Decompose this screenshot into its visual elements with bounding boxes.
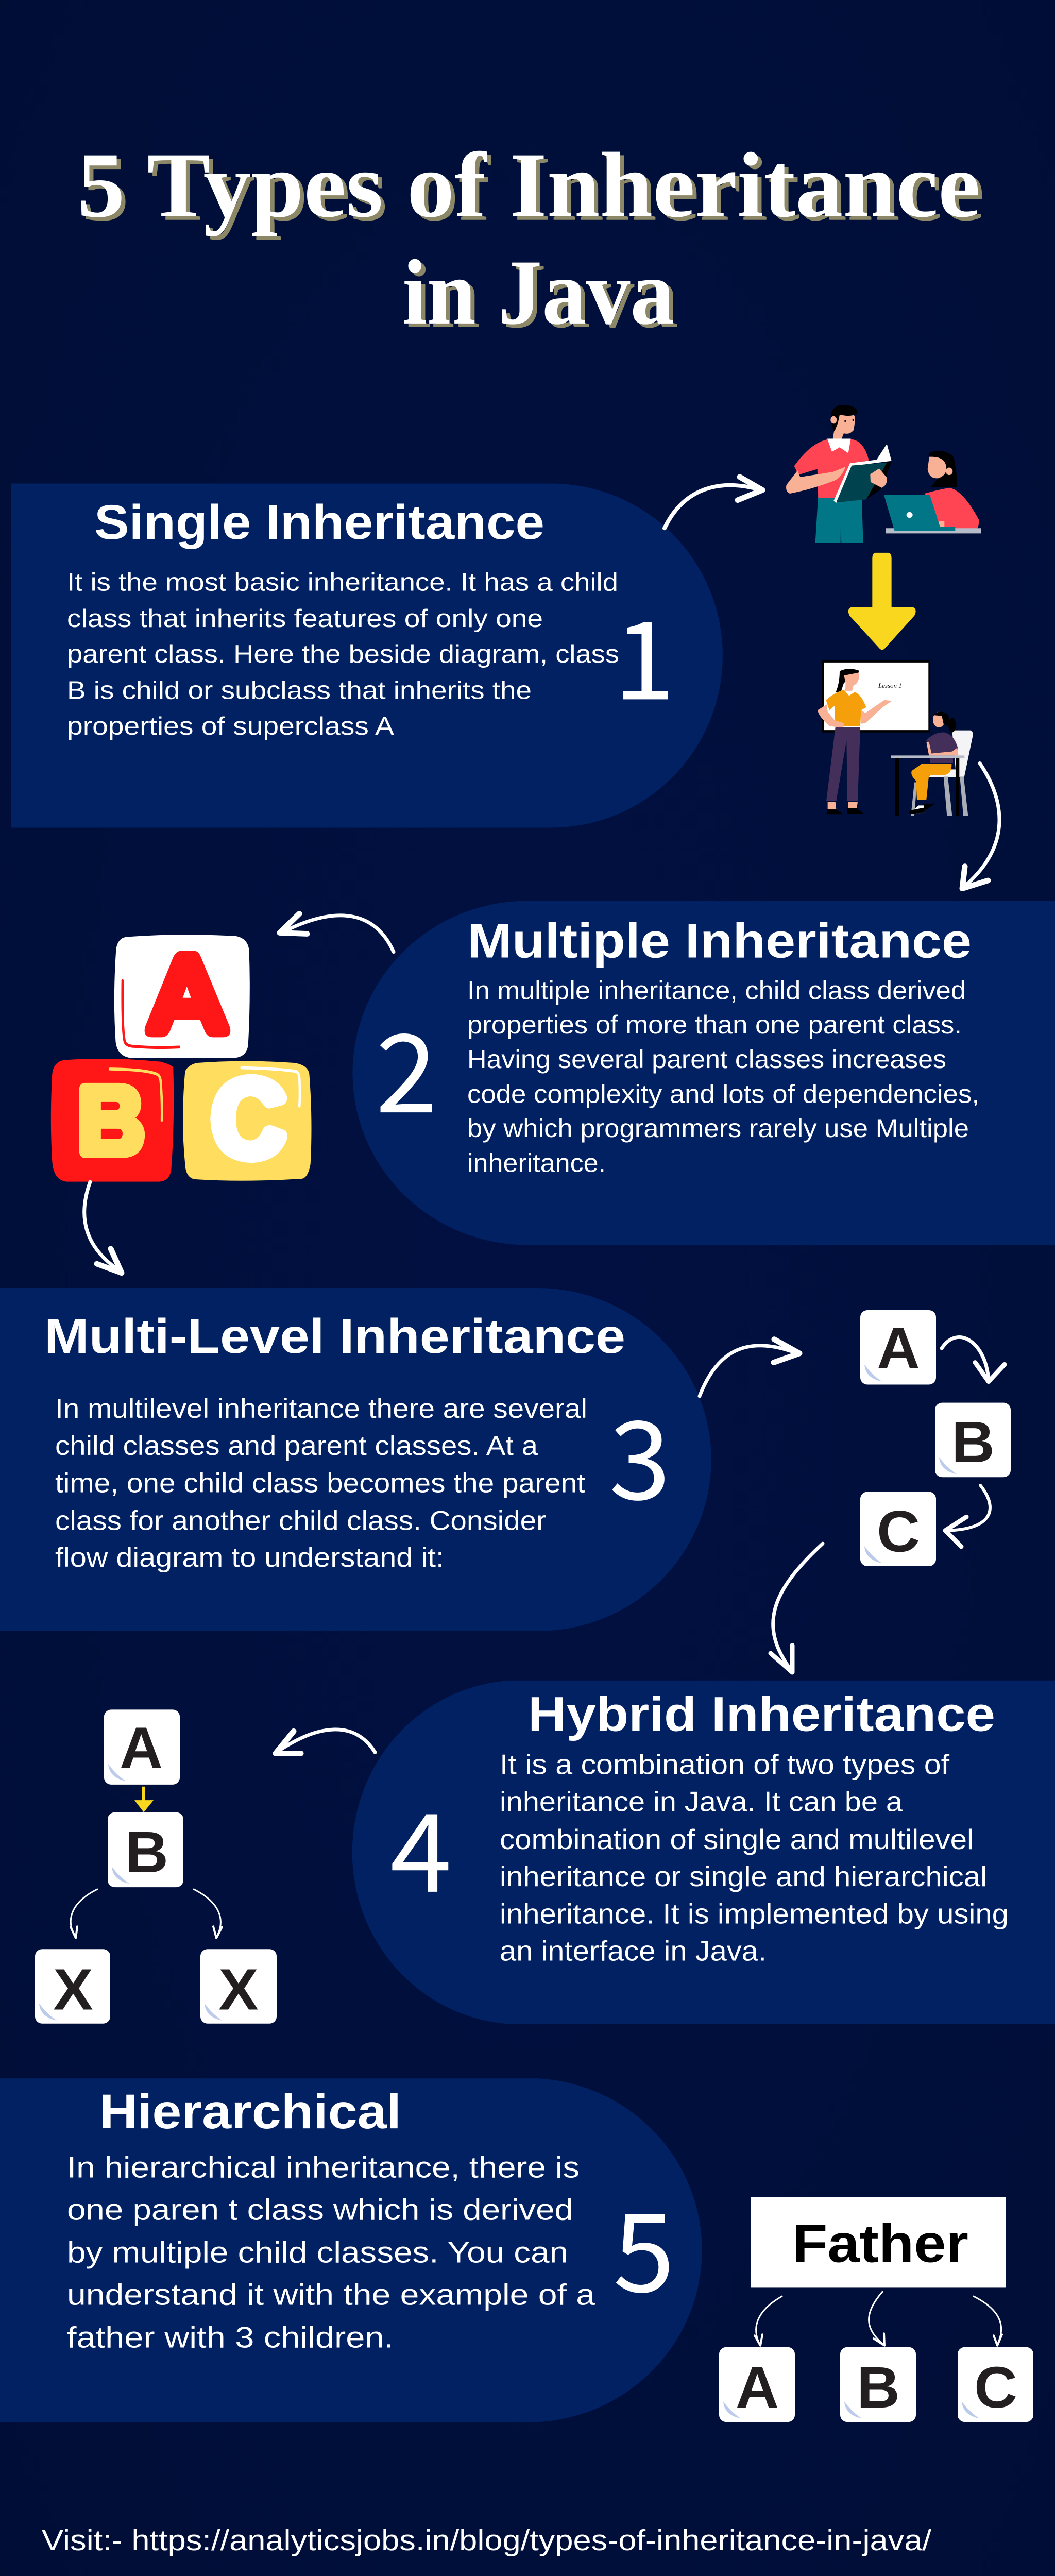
number 5: 5 bbox=[613, 2166, 675, 2324]
heading: single inheritance: Single Inheritance bbox=[94, 495, 544, 550]
heading: hybrid inheritance: Hybrid Inheritance bbox=[528, 1687, 995, 1741]
text: hierarchical description bbox=[67, 2151, 595, 2354]
number 2: 2 bbox=[376, 987, 437, 1144]
text: hybrid description: It is a combination of two types of bbox=[500, 1749, 950, 1780]
icon: man with book and woman with laptop bbox=[786, 405, 981, 543]
text: multi-level description: time, one child class becomes the parent bbox=[55, 1468, 585, 1498]
title: in Java bbox=[402, 241, 674, 344]
title: in Java bbox=[406, 244, 678, 347]
panel: hybrid inheritance bbox=[352, 1681, 1055, 2024]
diagram: father with three children bbox=[719, 2197, 1033, 2422]
text: hierarchical description: one paren t class which is derived bbox=[67, 2193, 573, 2226]
text: hierarchical description: by multiple child classes. You can bbox=[67, 2236, 568, 2269]
arrow: father to B bbox=[869, 2292, 884, 2346]
arrow: flow diagram to panel 4 bbox=[771, 1544, 823, 1672]
diagram: multilevel A B C bbox=[860, 1310, 1011, 1566]
text: single inheritance description bbox=[67, 568, 619, 740]
tile: X right: X bbox=[218, 1957, 259, 2022]
icon: teacher at whiteboard with student bbox=[818, 660, 973, 816]
tile: B bbox=[840, 2347, 916, 2422]
text: multiple inheritance description: inheritance. bbox=[467, 1148, 606, 1177]
text: hybrid description: an interface in Java. bbox=[500, 1935, 767, 1967]
tile: C bbox=[860, 1492, 936, 1566]
text: multiple inheritance description: by which programmers rarely use Multiple bbox=[467, 1114, 969, 1143]
text: multiple inheritance description: code complexity and lots of dependencies, bbox=[467, 1079, 979, 1108]
number 4: 4 bbox=[390, 1766, 452, 1923]
tile: X left: X bbox=[53, 1957, 93, 2022]
arrow: people to panel 2 bbox=[962, 763, 999, 889]
text: multiple inheritance description: Having several parent classes increases bbox=[467, 1045, 946, 1074]
tile: B: B bbox=[951, 1410, 995, 1475]
tile: A: A bbox=[120, 1716, 163, 1781]
arrow: panel 4 to hybrid diagram bbox=[276, 1730, 375, 1753]
box: father bbox=[751, 2197, 1006, 2287]
text: hybrid description: combination of single and multilevel bbox=[500, 1823, 974, 1855]
text: lesson label: Lesson 1 bbox=[878, 682, 902, 689]
arrow: father to C bbox=[974, 2296, 1002, 2346]
text: multiple inheritance description: In multiple inheritance, child class derived bbox=[467, 976, 966, 1005]
text: hierarchical description: understand it with the example of a bbox=[67, 2278, 595, 2311]
icon: ABC blocks bbox=[51, 935, 312, 1182]
tile: X left bbox=[35, 1949, 110, 2024]
text: hierarchical description: In hierarchical inheritance, there is bbox=[67, 2151, 580, 2184]
text: hybrid description: inheritance in Java. It can be a bbox=[500, 1786, 903, 1817]
text: single inheritance description: class that inherits features of only one bbox=[67, 604, 543, 633]
arrow: panel 2 to blocks bbox=[280, 913, 394, 952]
text: multi-level description: flow diagram to understand it: bbox=[55, 1543, 444, 1573]
arrow: father to A bbox=[755, 2296, 782, 2346]
title: 5 Types of Inheritance bbox=[77, 133, 980, 236]
text: multi-level description bbox=[55, 1394, 587, 1573]
text: hybrid description bbox=[500, 1749, 1009, 1967]
text: hybrid description: inheritance or single and hierarchical bbox=[500, 1861, 987, 1892]
text: multiple inheritance description: properties of more than one parent class. bbox=[467, 1010, 962, 1039]
tile: C: C bbox=[974, 2355, 1017, 2420]
text: single inheritance description: properties of superclass A bbox=[67, 712, 394, 740]
text: hybrid description: inheritance. It is implemented by using bbox=[500, 1898, 1009, 1929]
text: multiple inheritance description bbox=[467, 976, 979, 1177]
text: multi-level description: class for another child class. Consider bbox=[55, 1506, 546, 1536]
tile: A: A bbox=[877, 1316, 920, 1381]
diagram: hybrid A B X X bbox=[35, 1709, 277, 2024]
text: single inheritance description: parent class. Here the beside diagram, class bbox=[67, 640, 619, 668]
tile: C bbox=[958, 2347, 1033, 2422]
text: source link: Visit:- https://analyticsjobs.in/blog/types-of-inheritance-in-java/ bbox=[42, 2524, 931, 2557]
text: single inheritance description: B is child or subclass that inherits the bbox=[67, 676, 532, 704]
tile: A: A bbox=[736, 2355, 779, 2420]
tile: B: B bbox=[857, 2355, 900, 2420]
arrow: B to X right bbox=[194, 1889, 222, 1938]
heading: multiple inheritance: Multiple Inheritance bbox=[467, 913, 972, 968]
heading: hierarchical: Hierarchical bbox=[99, 2084, 401, 2139]
panel: multi-level inheritance bbox=[0, 1288, 711, 1631]
tile: A bbox=[104, 1709, 180, 1785]
panel: hierarchical inheritance bbox=[0, 2078, 702, 2422]
arrow: panel 3 to flow diagram bbox=[700, 1340, 799, 1396]
arrow: A to B bbox=[942, 1337, 1005, 1382]
arrow: yellow down arrow bbox=[848, 553, 916, 650]
arrow: blocks to panel 3 bbox=[84, 1182, 122, 1273]
text: multi-level description: In multilevel inheritance there are several bbox=[55, 1394, 587, 1424]
number 3: 3 bbox=[609, 1374, 671, 1531]
arrow: B to X left bbox=[71, 1889, 97, 1938]
panel: multiple inheritance bbox=[352, 901, 1055, 1245]
heading: multi-level inheritance: Multi-Level Inheritance bbox=[44, 1309, 625, 1364]
arrow: B to C bbox=[945, 1485, 990, 1547]
title bbox=[77, 133, 984, 347]
number 1: 1 bbox=[614, 573, 675, 731]
tile: C: C bbox=[877, 1499, 920, 1564]
text: single inheritance description: It is the most basic inheritance. It has a child bbox=[67, 568, 618, 596]
arrow: A to B yellow bbox=[134, 1787, 154, 1812]
box: father: Father bbox=[792, 2214, 968, 2274]
tile: B: B bbox=[125, 1820, 168, 1885]
title: 5 Types of Inheritance bbox=[81, 137, 984, 240]
arrow: panel 1 to people bbox=[665, 477, 762, 528]
tile: A bbox=[719, 2347, 795, 2422]
tile: A bbox=[860, 1310, 936, 1385]
tile: B bbox=[108, 1812, 183, 1887]
panel: single inheritance bbox=[11, 483, 723, 827]
text: hierarchical description: father with 3 children. bbox=[67, 2321, 394, 2354]
tile: X right bbox=[200, 1949, 277, 2024]
text: multi-level description: child classes and parent classes. At a bbox=[55, 1431, 538, 1461]
tile: B bbox=[935, 1403, 1011, 1477]
